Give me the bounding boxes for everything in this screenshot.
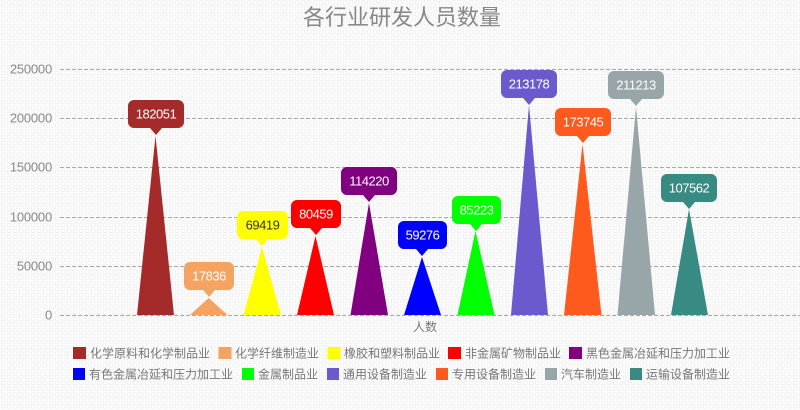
legend: 非金属矿物制品业: [465, 346, 561, 360]
bar: 通用设备制造业: 213178: [509, 76, 549, 92]
y axis labels: 200000: [10, 110, 52, 126]
bar: 橡胶和塑料制品业: 69419: [246, 218, 280, 232]
bar: 通用设备制造业: [501, 70, 557, 315]
bar: 有色金属冶延和压力加工业: 59276: [406, 228, 440, 242]
bar: 金属制品业: 85223: [460, 202, 494, 218]
y axis labels: 0: [45, 308, 52, 322]
bar: 专用设备制造业: [555, 108, 611, 315]
legend: 专用设备制造业: [452, 366, 536, 382]
y axis labels: 50000: [17, 258, 52, 274]
legend: 通用设备制造业: [343, 368, 427, 382]
title: 各行业研发人员数量: [303, 5, 501, 30]
legend: [73, 346, 730, 382]
legend: 金属制品业: [258, 366, 318, 382]
bar: 化学纤维制造业: [184, 262, 234, 315]
bar: 运输设备制造业: [661, 174, 717, 315]
bar: 有色金属冶延和压力加工业: [398, 221, 447, 315]
bar: 运输设备制造业: 107562: [669, 180, 709, 196]
bar: 化学原料和化学制品业: [128, 100, 184, 315]
legend: 黑色金属冶延和压力加工业: [586, 346, 730, 360]
bar: 黑色金属冶延和压力加工业: 114220: [349, 174, 389, 188]
legend: 运输设备制造业: [646, 366, 730, 382]
bar: 化学纤维制造业: 17836: [192, 268, 226, 284]
bar: 橡胶和塑料制品业: [237, 211, 288, 315]
legend: 橡胶和塑料制品业: [344, 346, 440, 360]
legend: 汽车制造业: [561, 366, 621, 382]
bar: 汽车制造业: [608, 71, 664, 315]
bar: 非金属矿物制品业: 80459: [299, 206, 333, 222]
y axis labels: 150000: [10, 160, 52, 174]
y axis labels: 100000: [10, 210, 52, 224]
y axis labels: [10, 62, 52, 322]
bar: 汽车制造业: 211213: [616, 78, 656, 92]
bar: 金属制品业: [452, 196, 501, 315]
bar: 黑色金属冶延和压力加工业: [341, 167, 397, 315]
legend: 化学原料和化学制品业: [90, 346, 210, 360]
bar: 非金属矿物制品业: [291, 200, 341, 315]
bar: 化学原料和化学制品业: 182051: [136, 106, 176, 122]
legend: 有色金属冶延和压力加工业: [89, 366, 233, 382]
bar: 专用设备制造业: 173745: [563, 114, 603, 130]
legend: 化学纤维制造业: [235, 346, 319, 360]
x axis name: 人数: [413, 319, 437, 334]
y axis labels: 250000: [10, 62, 52, 76]
